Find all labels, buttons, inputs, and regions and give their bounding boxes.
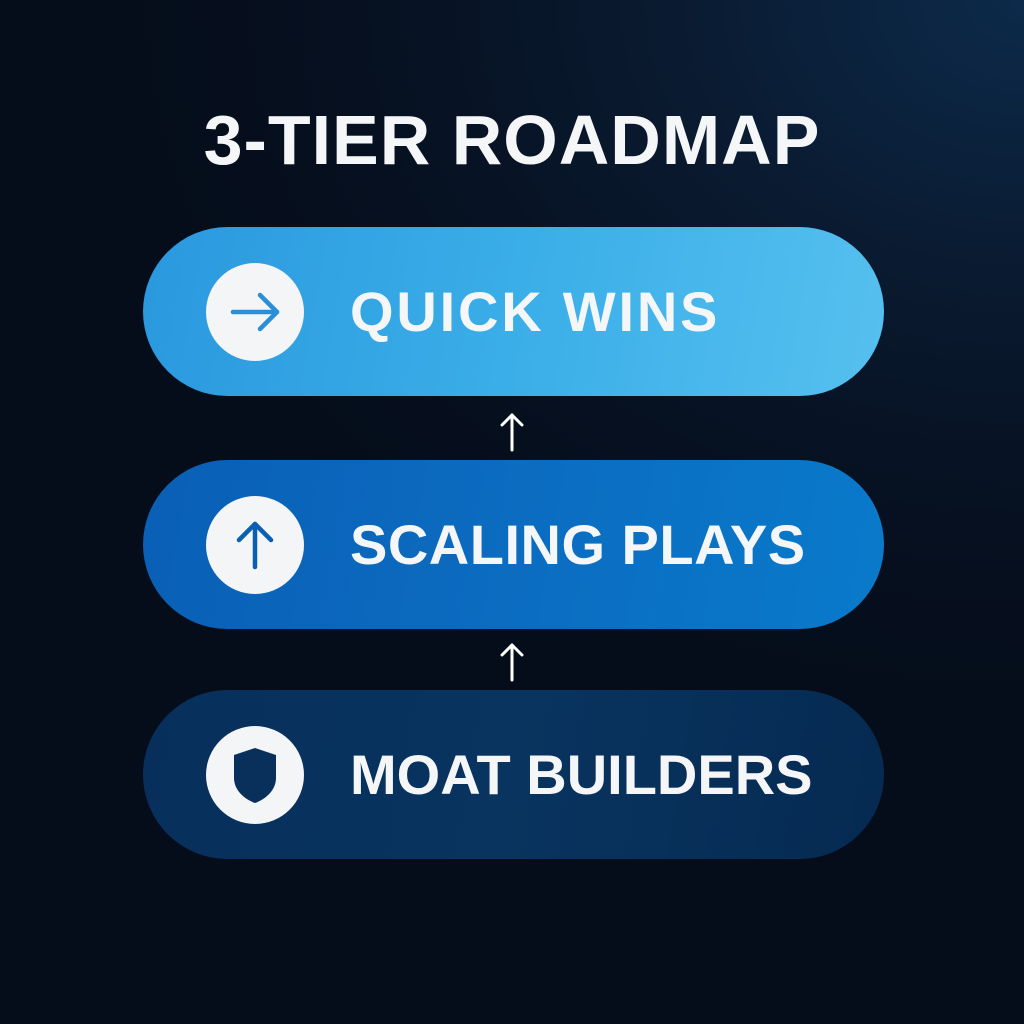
label: quick wins: QUICK WINS	[350, 280, 720, 343]
label: scaling plays: SCALING PLAYS	[350, 513, 806, 576]
panel: quick wins	[143, 227, 884, 396]
icon: up arrow	[206, 496, 304, 594]
label: moat builders: MOAT BUILDERS	[350, 743, 812, 806]
arrow: up 2	[500, 643, 524, 682]
arrow: up 1	[500, 413, 524, 452]
icon: right arrow	[206, 263, 304, 361]
panel: scaling plays	[143, 460, 884, 629]
icon: shield	[206, 726, 304, 824]
panel: moat builders	[143, 690, 884, 859]
title: 3-TIER ROADMAP	[204, 101, 820, 179]
